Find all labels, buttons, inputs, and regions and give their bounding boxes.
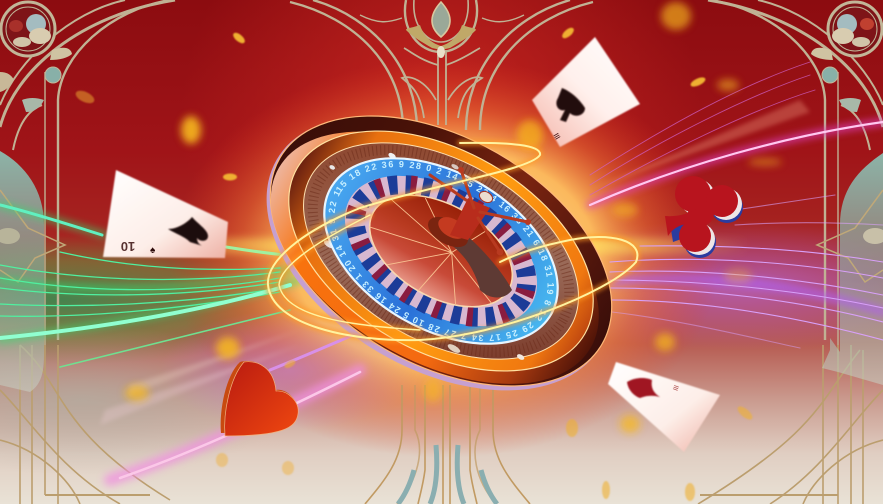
playing card: left — [103, 170, 228, 258]
playing card: top right — [532, 37, 640, 147]
teal leaf panel: left — [0, 151, 65, 392]
radiating light rays — [100, 100, 810, 425]
corner ornament: top right — [811, 2, 882, 112]
green light streaks — [0, 205, 300, 367]
playing card: top right: ≡ — [552, 130, 563, 144]
right inner arch — [710, 0, 825, 340]
club silver side — [679, 179, 742, 255]
centre arches — [290, 2, 403, 130]
bottom sweeps — [0, 345, 883, 504]
wheel underside edge — [219, 59, 659, 447]
teal centre bands — [398, 445, 497, 504]
left outer arch — [0, 0, 175, 127]
corner ornament: top left — [0, 2, 72, 112]
spade — [556, 88, 585, 122]
playing card: bottom right — [608, 362, 720, 452]
club suit icon — [665, 176, 743, 258]
silver studs — [387, 152, 397, 160]
heart suit icon — [221, 361, 298, 436]
small gold flecks — [74, 26, 754, 501]
spokes — [354, 178, 523, 326]
orange crescent band — [228, 79, 642, 436]
bronze studded ring — [266, 98, 616, 404]
red inner cone — [350, 172, 532, 330]
centre columns bottom — [365, 385, 530, 504]
orange inner ring — [247, 81, 635, 421]
outer rim — [223, 60, 659, 442]
glowing golden orbit loops — [268, 143, 637, 340]
playing card: left: ♠ — [150, 245, 156, 256]
golden bokeh particles — [125, 2, 782, 433]
spade — [627, 378, 660, 398]
centre stem — [438, 50, 446, 125]
playing card: bottom right: ≡ — [671, 382, 680, 395]
pocket stripes — [319, 145, 563, 357]
purple and pink light streaks — [110, 62, 883, 480]
card index: 10 — [121, 239, 135, 254]
right outer arch — [708, 0, 883, 127]
spade — [168, 217, 208, 246]
teal leaf panel: right — [817, 153, 883, 385]
club face — [665, 176, 738, 252]
left inner arch — [58, 0, 170, 340]
centre hub turret — [423, 167, 531, 298]
ring numbers: 15 18 22 36 9 28 0 2 14 35 23 4 16 33 21 6 18 31 19 8 12 29 25 17 34 7 27 28 10 5 24 16 33 1 20 14 31 9 22 18 — [328, 161, 554, 342]
club blue edge — [670, 191, 743, 258]
centre lotus ornament — [406, 2, 476, 58]
blue number ring — [292, 120, 590, 382]
roulette wheel — [266, 115, 612, 390]
